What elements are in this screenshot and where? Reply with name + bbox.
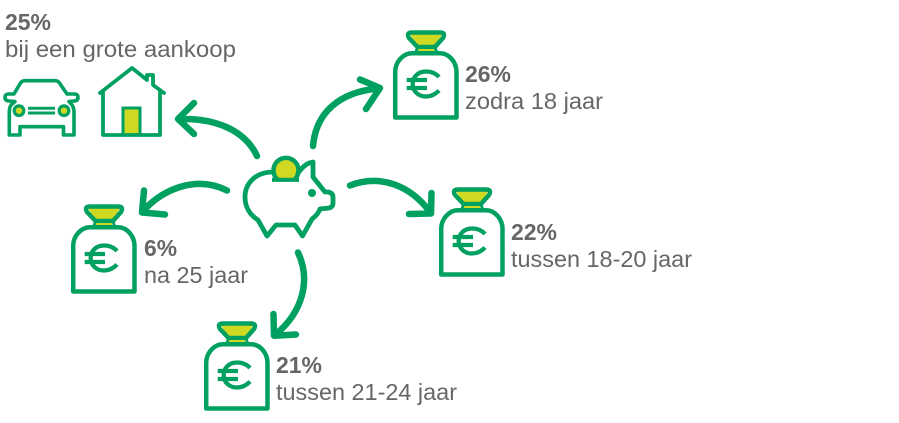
label: 25% bij een grote aankoop: 25% [5, 9, 51, 35]
money bag: 22% [441, 190, 502, 274]
label: 25% bij een grote aankoop: bij een grote aankoop [5, 36, 236, 62]
label: 26% zodra 18 jaar [465, 61, 603, 114]
icon: piggy bank [245, 158, 333, 236]
label: 22% tussen 18-20 jaar: tussen 18-20 jaar [511, 246, 692, 272]
money bag: 26% [395, 32, 456, 118]
arrow: to 21% [274, 252, 304, 336]
icon: house [100, 68, 164, 135]
arrow: to 22% [350, 181, 432, 214]
money bag: 6% [73, 206, 134, 292]
label: 6% na 25 jaar: 6% [144, 235, 177, 261]
label: 21% tussen 21-24 jaar [276, 352, 457, 405]
label: 26% zodra 18 jaar: 26% [465, 61, 511, 87]
label: 22% tussen 18-20 jaar: 22% [511, 219, 557, 245]
label: 21% tussen 21-24 jaar: tussen 21-24 jaar [276, 379, 457, 405]
label: 25% bij een grote aankoop [5, 9, 236, 62]
arrow: to 26% [313, 80, 380, 146]
label: 22% tussen 18-20 jaar [511, 219, 692, 272]
label: 6% na 25 jaar: na 25 jaar [144, 262, 248, 288]
label: 6% na 25 jaar [144, 235, 248, 288]
icon: car [5, 81, 78, 135]
arrow: to purchase [178, 103, 257, 156]
arrow: to 6% [142, 184, 227, 214]
label: 21% tussen 21-24 jaar: 21% [276, 352, 322, 378]
label: 26% zodra 18 jaar: zodra 18 jaar [465, 88, 603, 114]
money bag: 21% [206, 324, 268, 408]
